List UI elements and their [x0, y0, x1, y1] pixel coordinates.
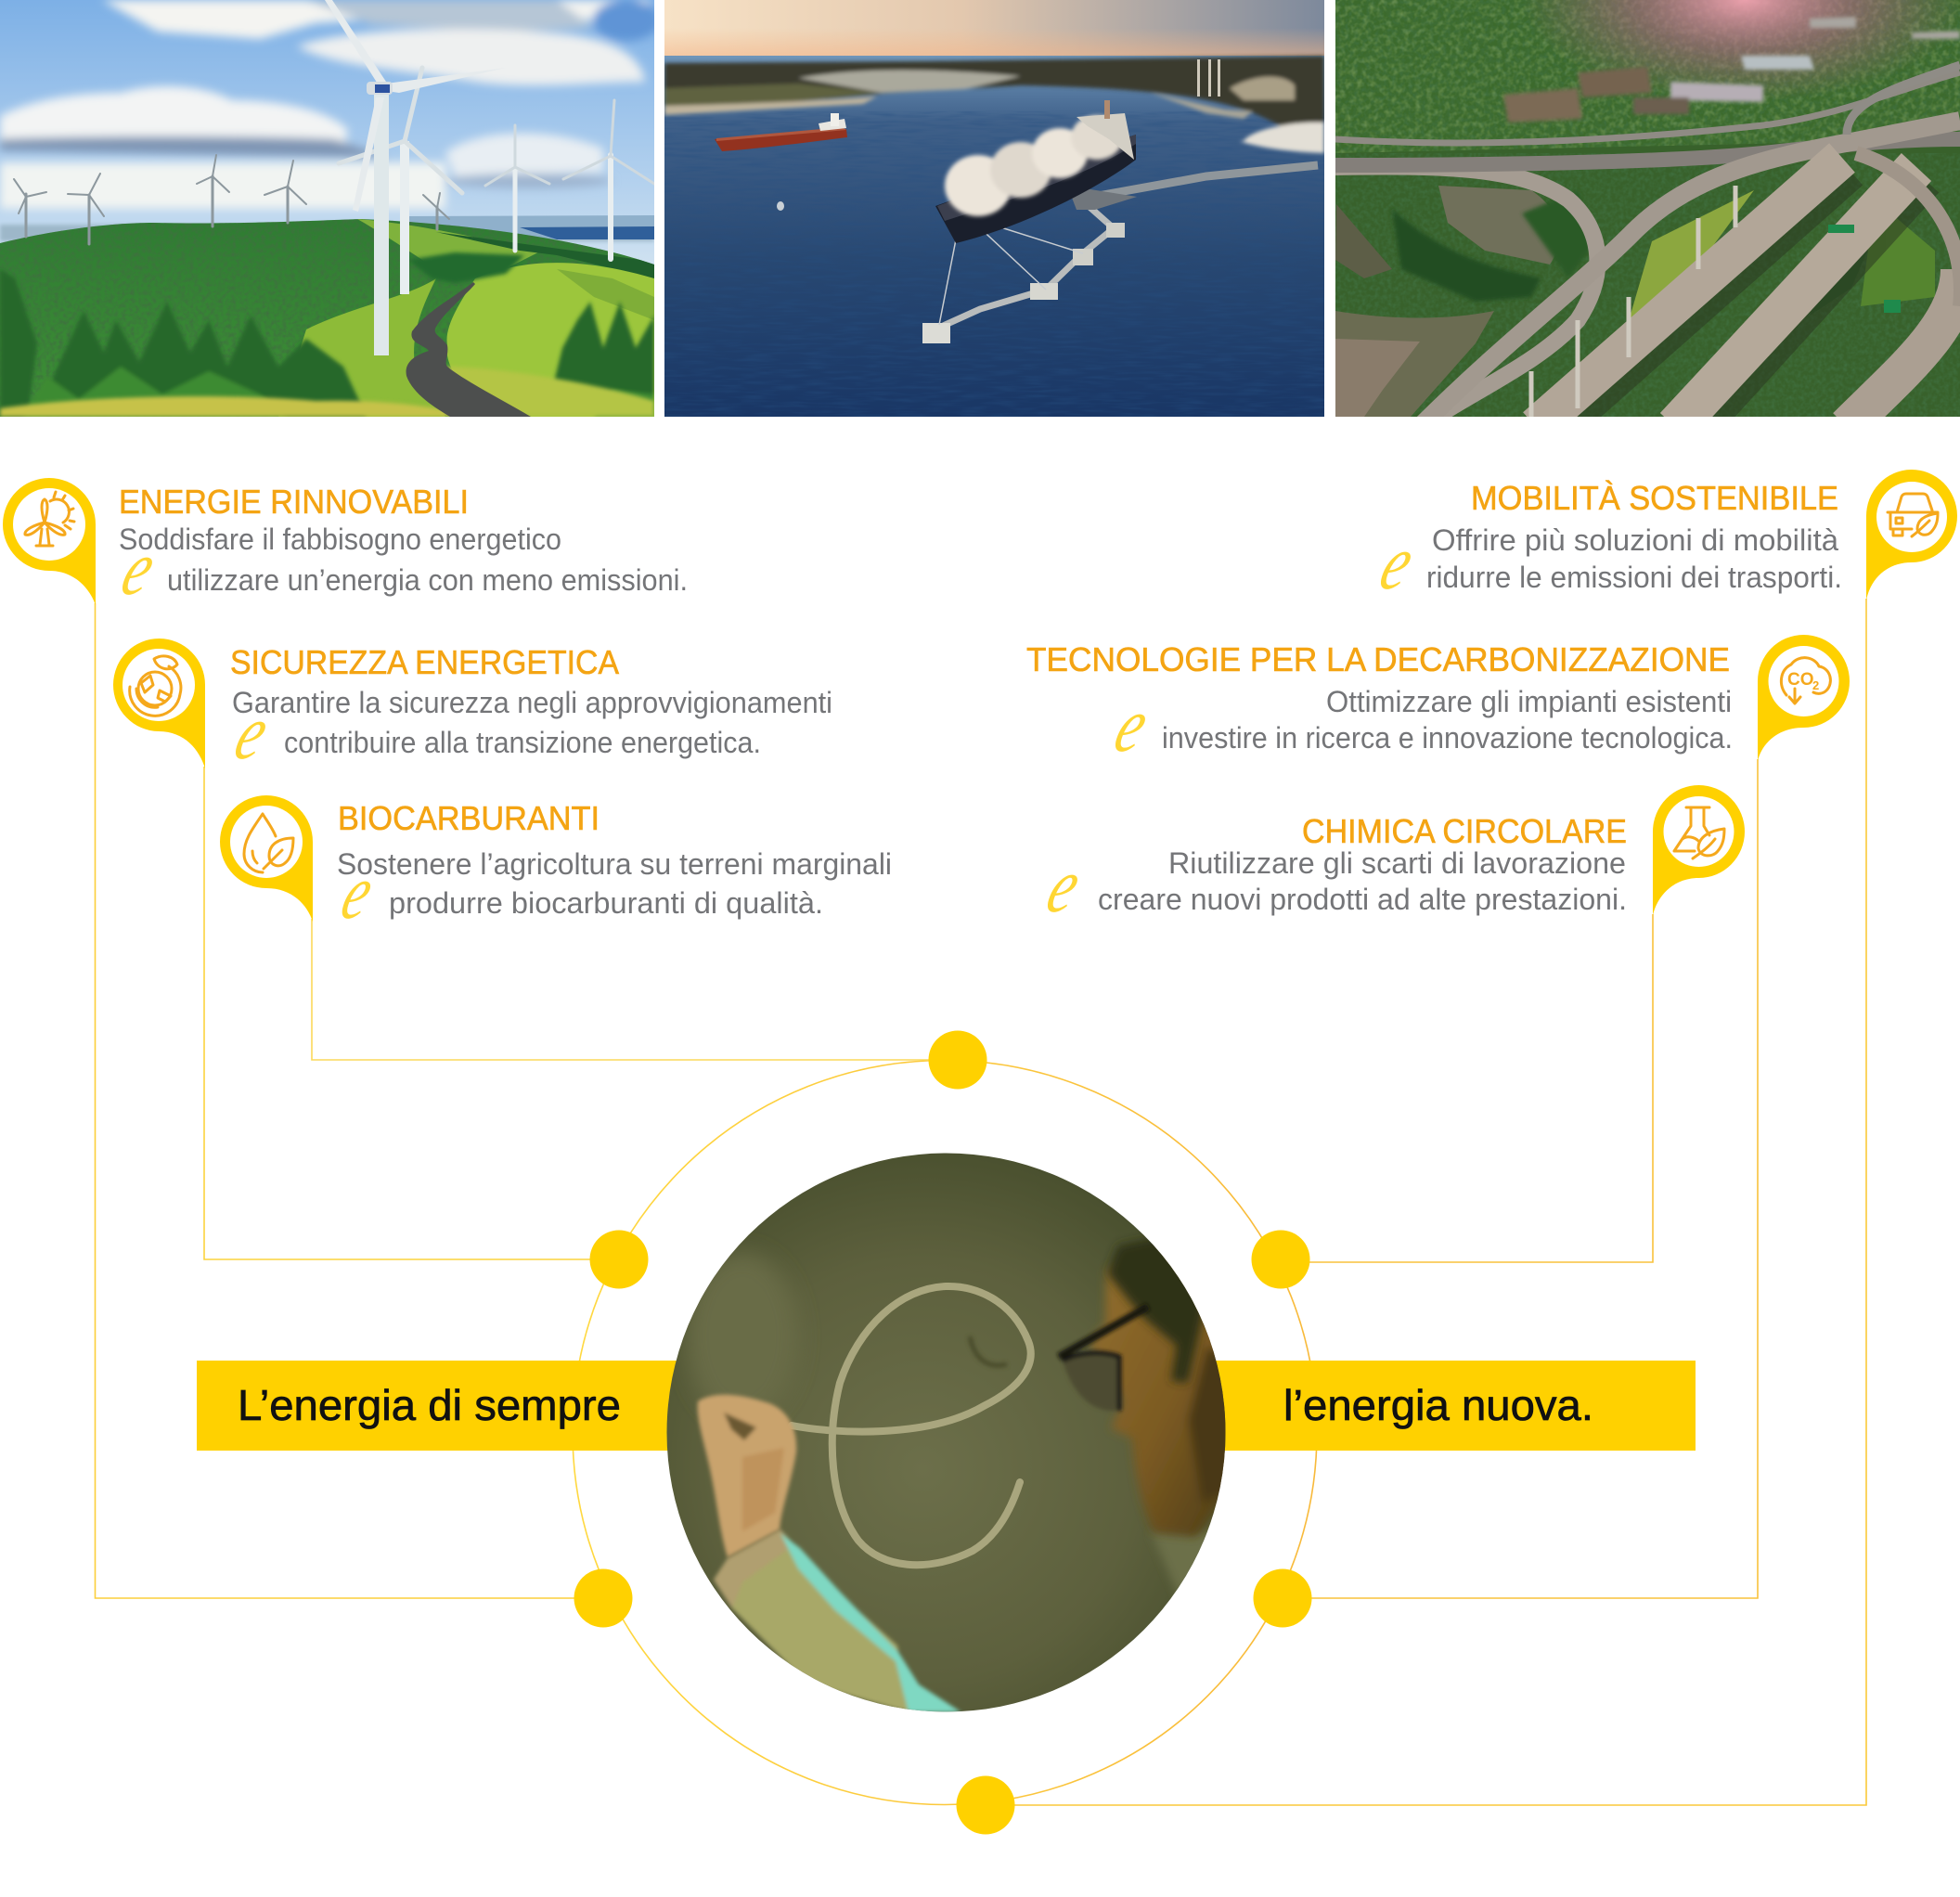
body line 1: Riutilizzare gli scarti di lavorazione: [1168, 846, 1626, 880]
text block: chimica circolare: [1038, 812, 1627, 929]
photo: LNG carrier at jetty: [664, 0, 1324, 427]
neck and collar: [1154, 1520, 1212, 1594]
yellow band: [197, 1361, 1696, 1451]
ring around centre photo: [573, 1060, 1317, 1804]
text block: tecnologie per la decarbonizzazione: [1026, 640, 1733, 768]
heading: SICUREZZA ENERGETICA: [230, 643, 619, 681]
pin: sicurezza energetica: [113, 639, 205, 768]
heading: BIOCARBURANTI: [338, 799, 600, 837]
dots on ring: [574, 1030, 1312, 1834]
text block: energie rinnovabili: [112, 483, 688, 612]
buildings: [1503, 17, 1960, 123]
body line 2: investire in ricerca e innovazione tecnologica.: [1162, 721, 1733, 755]
icon: drop with leaf: [244, 814, 293, 872]
ground fills: [1335, 139, 1960, 417]
body line 2: creare nuovi prodotti ad alte prestazioni.: [1098, 883, 1627, 916]
icon: CO2 cloud with down arrow: CO: [1787, 670, 1813, 690]
script e: e: [1105, 682, 1159, 768]
connector lines: [95, 599, 1866, 1805]
hand: [698, 1395, 796, 1557]
body line 1: Ottimizzare gli impianti esistenti: [1326, 685, 1732, 718]
body line 2: contribuire alla transizione energetica.: [284, 726, 761, 759]
carrier hull: [935, 135, 1136, 243]
heading: ENERGIE RINNOVABILI: [119, 483, 469, 521]
road: [406, 282, 531, 417]
red tanker: [715, 113, 847, 151]
icon: globe with leaf: [130, 656, 181, 716]
pin: mobilità sostenibile: [1866, 470, 1957, 600]
body line 2: produrre biocarburanti di qualità.: [389, 886, 823, 920]
heading: CHIMICA CIRCOLARE: [1302, 812, 1627, 850]
body line 1: Soddisfare il fabbisogno energetico: [119, 523, 561, 556]
script e: e: [226, 690, 279, 776]
sleeve: [714, 1529, 961, 1712]
text block: sicurezza energetica: [226, 643, 832, 776]
pin: energie rinnovabili: [3, 478, 96, 605]
roads: [1335, 65, 1960, 427]
icon: car with leaf: [1888, 494, 1938, 536]
foreground trees: [0, 252, 654, 417]
pin: tecnologie per la decarbonizzazione: [1758, 635, 1850, 761]
script e: e: [1371, 520, 1425, 606]
jetty: [1088, 165, 1318, 198]
road shadows: [1578, 174, 1939, 417]
body line 1: Garantire la sicurezza negli approvvigionamenti: [232, 686, 832, 719]
icon: CO2 cloud with down arrow: 2: [1812, 678, 1819, 692]
head: [1090, 1248, 1239, 1537]
icon: CO2 cloud with down arrow: [1781, 658, 1830, 703]
body line 1: Sostenere l’agricoltura su terreni marginali: [337, 847, 892, 881]
script e: e: [112, 525, 166, 612]
heading: MOBILITÀ SOSTENIBILE: [1471, 479, 1838, 517]
photo: highway interchange: [1335, 0, 1960, 432]
body line 2: utilizzare un’energia con meno emissioni.: [167, 563, 688, 597]
lime fields: [357, 219, 538, 271]
band text left: L’energia di sempre: [238, 1381, 621, 1429]
script e: e: [1038, 843, 1091, 929]
script e: e: [332, 849, 383, 936]
pin: chimica circolare: [1653, 785, 1745, 916]
body line 2: ridurre le emissioni dei trasporti.: [1426, 561, 1842, 594]
text block: biocarburanti: [332, 799, 892, 936]
photo: hand writing chalk e on blackboard: [666, 1153, 1225, 1711]
heading: TECNOLOGIE PER LA DECARBONIZZAZIONE: [1026, 640, 1730, 678]
icon: flask with leaf: [1674, 807, 1724, 858]
band text right: l’energia nuova.: [1283, 1381, 1593, 1429]
photo: wind turbines on green hills: [0, 0, 660, 417]
body line 1: Offrire più soluzioni di mobilità: [1432, 523, 1838, 557]
icon: wind turbine and sun: [25, 492, 74, 546]
pin: biocarburanti: [220, 795, 313, 922]
text block: mobilità sostenibile: [1371, 479, 1842, 606]
